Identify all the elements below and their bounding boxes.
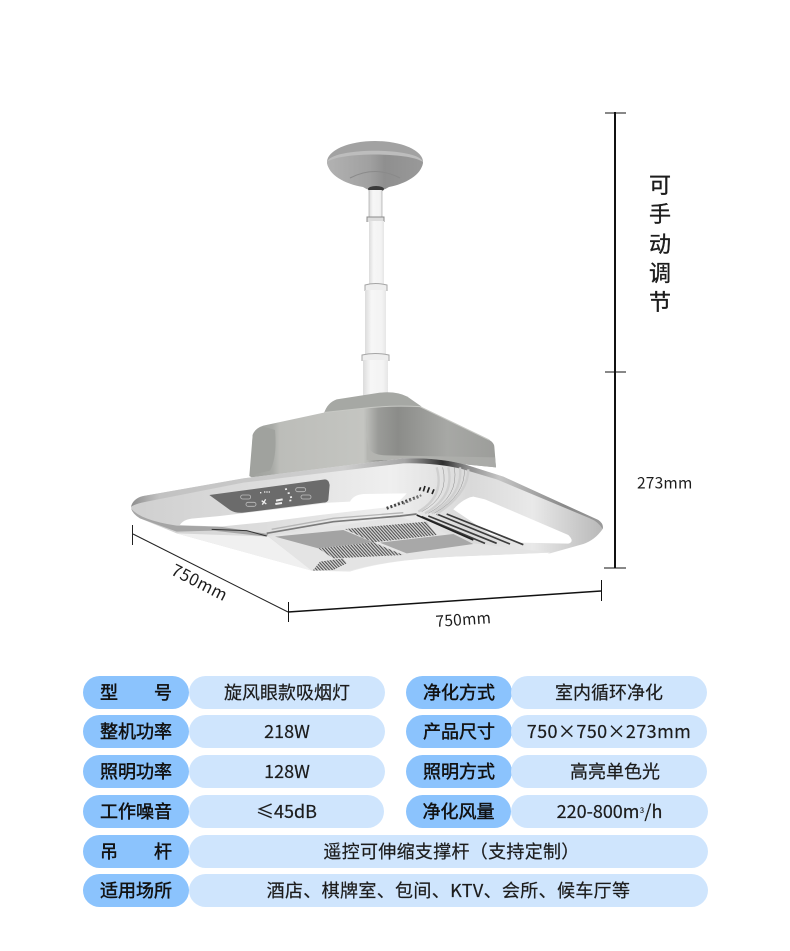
row 1 purification label: 净化方式 (423, 679, 495, 705)
lower centre plate (268, 517, 550, 571)
vertical dimension line (604, 112, 626, 568)
row 5 rod value (189, 835, 708, 868)
hood assembly (131, 392, 603, 572)
label: manually adjustable: 节 (649, 285, 671, 317)
row 1 model label: 号 (154, 679, 172, 705)
row 6 venues label (83, 874, 189, 907)
row 4 noise label: 工作噪音 (100, 798, 172, 824)
row 3 lighting power label (83, 755, 189, 788)
spec table (83, 676, 708, 907)
label: left 750mm: 750mm (168, 557, 233, 606)
row 4 noise value: ≤45dB (256, 798, 317, 824)
row 3 lighting mode value: 高亮单色光 (570, 758, 660, 784)
row 3 lighting power value (189, 755, 385, 788)
hood upper body (249, 406, 496, 478)
row 3 lighting mode label: 照明方式 (423, 758, 495, 784)
label: manually adjustable: 动 (649, 227, 671, 259)
vent slats right (417, 514, 523, 545)
filter mesh (275, 522, 473, 571)
label: front 750mm: 750mm (435, 606, 492, 632)
front pale edge (177, 533, 312, 571)
telescopic pole (362, 190, 389, 396)
row 2 power value (189, 715, 385, 748)
row 6 venues value: 酒店、棋牌室、包间、KTV、会所、候车厅等 (267, 877, 630, 903)
row 4 airflow label (406, 795, 511, 828)
row 2 power label (83, 715, 189, 748)
row 4 airflow label: 净化风量 (422, 798, 494, 824)
row 4 airflow value (511, 795, 708, 828)
row 2 power value: 218W (264, 718, 310, 744)
row 4 airflow value: 220-800m³/h (557, 798, 662, 824)
row 5 rod label: 杆 (154, 838, 172, 864)
label: 273mm: 273mm (637, 472, 693, 494)
row 1 model label (83, 676, 189, 709)
row 3 lighting mode value (511, 755, 707, 788)
row 1 model value: 旋风眼款吸烟灯 (224, 679, 350, 705)
row 4 noise label (83, 795, 189, 828)
canopy underside (131, 458, 603, 572)
white light strip, front (180, 493, 407, 527)
row 3 lighting mode label (406, 755, 512, 788)
row 4 noise value (189, 795, 384, 828)
row 5 rod label (83, 835, 189, 868)
left depth dimension line (132, 525, 288, 612)
label: manually adjustable: 手 (649, 197, 671, 229)
white light strip, right (453, 497, 572, 544)
swoosh vents (418, 467, 468, 514)
row 6 venues value (189, 874, 708, 907)
row 6 venues label: 适用场所 (100, 877, 172, 903)
row 1 model value (189, 676, 385, 709)
row 5 rod value: 遥控可伸缩支撑杆（支持定制） (323, 838, 580, 864)
vent slats front (267, 495, 422, 533)
canopy rim highlight (131, 458, 603, 529)
row 2 size label: 产品尺寸 (423, 718, 495, 744)
row 2 size label (406, 715, 512, 748)
row 2 power label: 整机功率 (100, 718, 172, 744)
control panel (209, 479, 330, 513)
row 3 lighting power value: 128W (264, 758, 310, 784)
label: manually adjustable: 可 (649, 168, 671, 200)
left lower rim (131, 508, 268, 537)
product illustration with dimension lines (131, 112, 693, 632)
ceiling mount disc (327, 141, 423, 192)
row 1 model label: 型 (100, 679, 118, 705)
row 3 lighting power label: 照明功率 (100, 758, 172, 784)
row 2 size value: 750×750×273mm (527, 718, 691, 744)
row 1 purification value: 室内循环净化 (555, 679, 663, 705)
label: manually adjustable: 调 (649, 256, 671, 288)
front width dimension line (288, 580, 602, 622)
row 5 rod label: 吊 (100, 838, 118, 864)
row 1 purification value (511, 676, 707, 709)
row 2 size value (511, 715, 707, 748)
white lower edge (350, 553, 550, 572)
label: manually adjustable (649, 168, 671, 317)
hood top cap (324, 392, 422, 415)
row 1 purification label (406, 676, 512, 709)
